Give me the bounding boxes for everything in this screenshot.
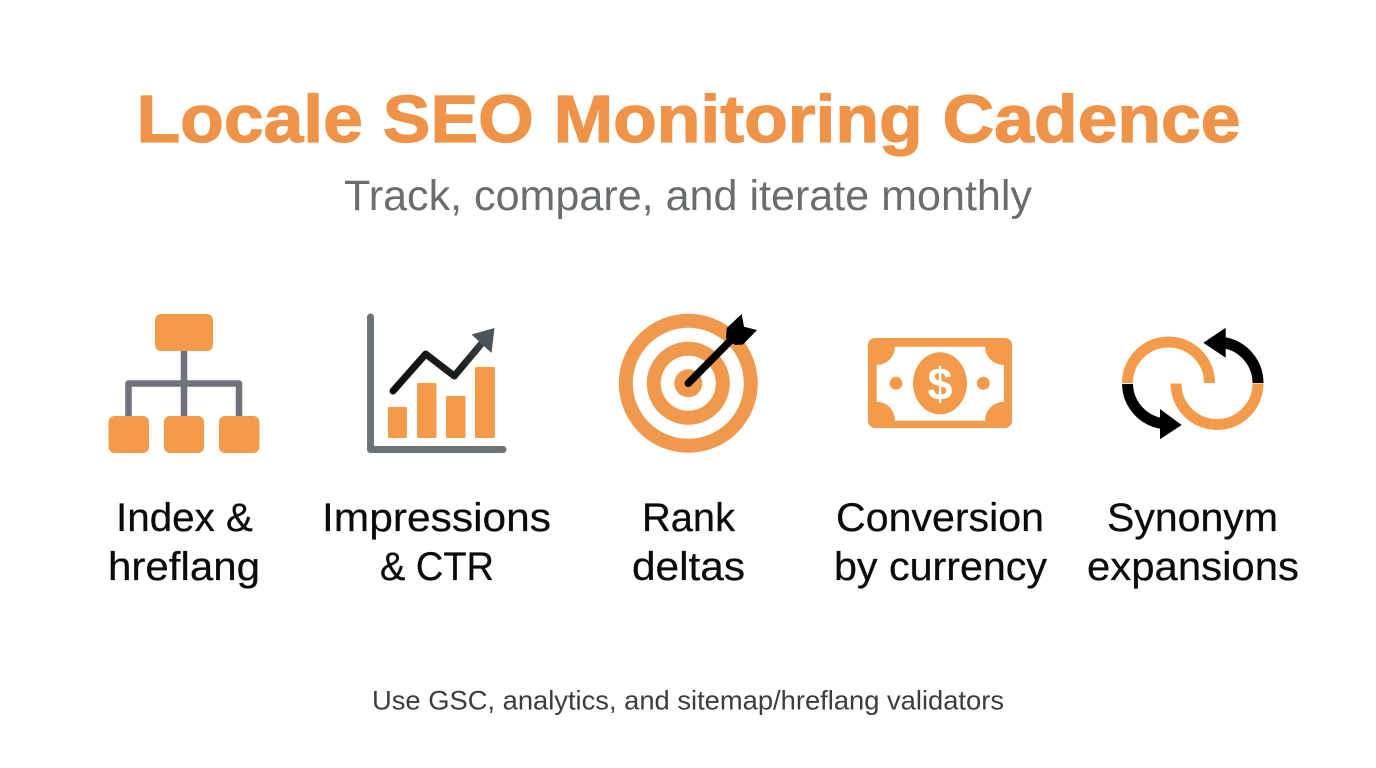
label: rank deltas <box>632 496 745 589</box>
icon: synonym cycle arrows <box>1128 328 1258 439</box>
label: impressions and CTR <box>322 496 551 589</box>
label: synonym expansions: Synonym <box>1107 496 1278 540</box>
title: Locale SEO Monitoring Cadence <box>136 82 1240 157</box>
icon: growth chart <box>370 317 503 450</box>
label: index and hreflang: Index & <box>116 496 253 540</box>
label: index and hreflang <box>108 496 260 589</box>
icon: banknote <box>868 338 1012 428</box>
icon: site hierarchy <box>108 314 260 453</box>
label: impressions and CTR: Impressions <box>322 496 551 540</box>
label: conversion by currency <box>834 496 1047 589</box>
footer note: Use GSC, analytics, and sitemap/hreflang validators <box>372 686 1004 716</box>
icon: banknote: $ <box>927 358 953 410</box>
label: conversion by currency: by currency <box>834 545 1047 589</box>
label: impressions and CTR: & CTR <box>380 545 494 589</box>
label: index and hreflang: hreflang <box>108 545 260 589</box>
icon: target with dart <box>626 314 757 446</box>
label: synonym expansions: expansions <box>1087 545 1299 589</box>
label: rank deltas: Rank <box>642 496 736 540</box>
label: synonym expansions <box>1087 496 1299 589</box>
label: conversion by currency: Conversion <box>836 496 1044 540</box>
subtitle: Track, compare, and iterate monthly <box>344 172 1032 220</box>
label: rank deltas: deltas <box>632 545 745 589</box>
